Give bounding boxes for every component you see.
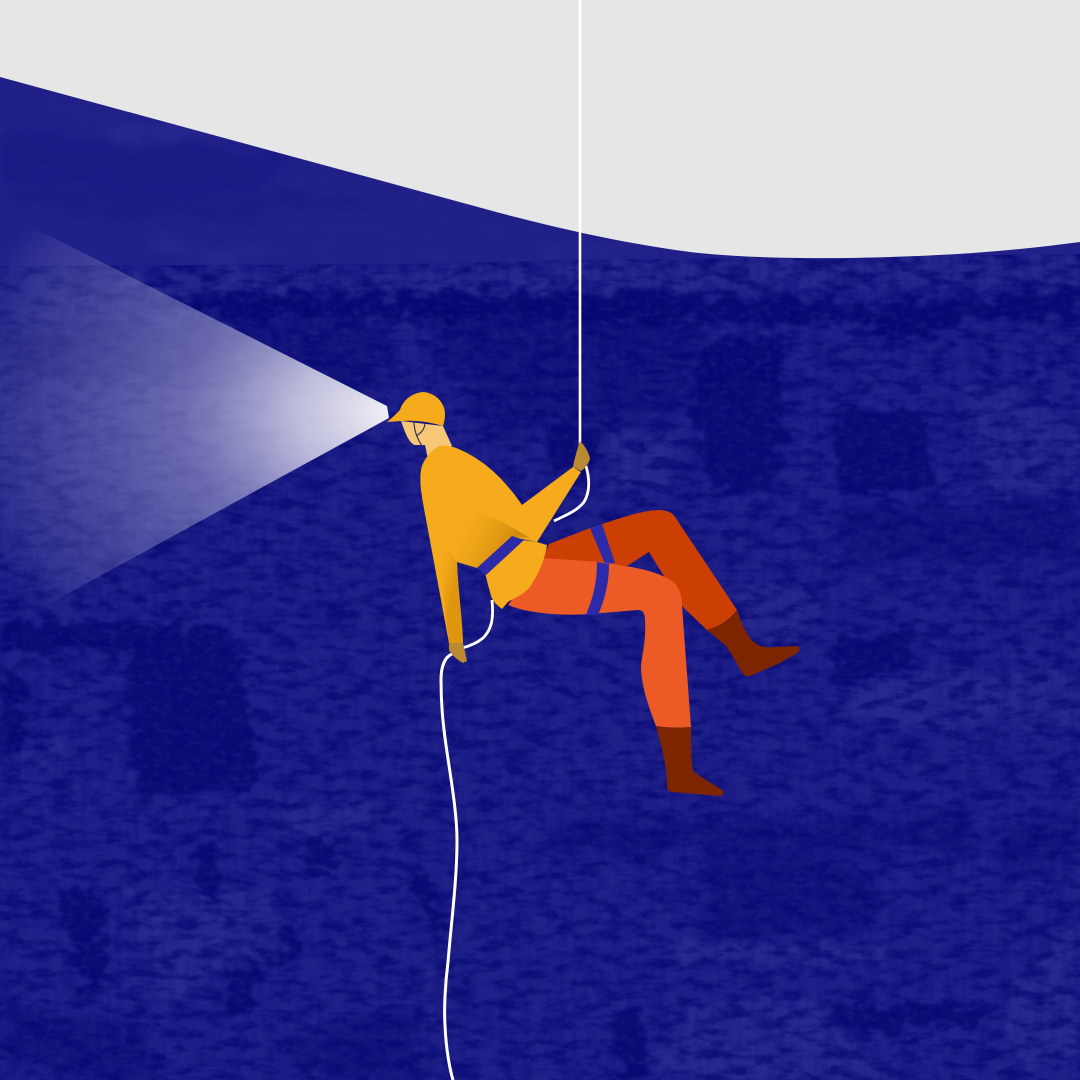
rope: hand to harness loops [462, 466, 589, 648]
head strap [414, 422, 425, 446]
rope: upper vertical line [579, 0, 581, 445]
hanging arm shading [436, 530, 463, 643]
front leg [508, 558, 691, 728]
canyon background [0, 250, 1080, 1080]
helmet [387, 392, 445, 426]
back boot [707, 610, 800, 676]
canyon dark shadows [0, 288, 1080, 1080]
front boot [656, 726, 723, 796]
torso shading [440, 493, 530, 568]
canyon soft shading [0, 300, 1080, 1080]
canyon surface grain [0, 250, 1080, 1080]
pale curved top area [0, 0, 1080, 258]
canyon rock texture [0, 250, 1080, 1080]
lower torso [485, 540, 547, 609]
headlamp light beam [0, 212, 389, 630]
front leg strap [586, 562, 609, 615]
neck and face [401, 421, 452, 459]
climber figure [387, 392, 800, 796]
rope: lower hanging line [441, 654, 457, 1080]
lower gloved hand [449, 643, 467, 663]
canyon light slopes [202, 285, 1040, 972]
sky with clouds [0, 0, 1080, 270]
upper gloved hand [573, 441, 590, 471]
back leg strap [590, 524, 615, 564]
upper body silhouette [420, 446, 581, 643]
back leg [543, 510, 737, 630]
harness belt [477, 536, 524, 575]
